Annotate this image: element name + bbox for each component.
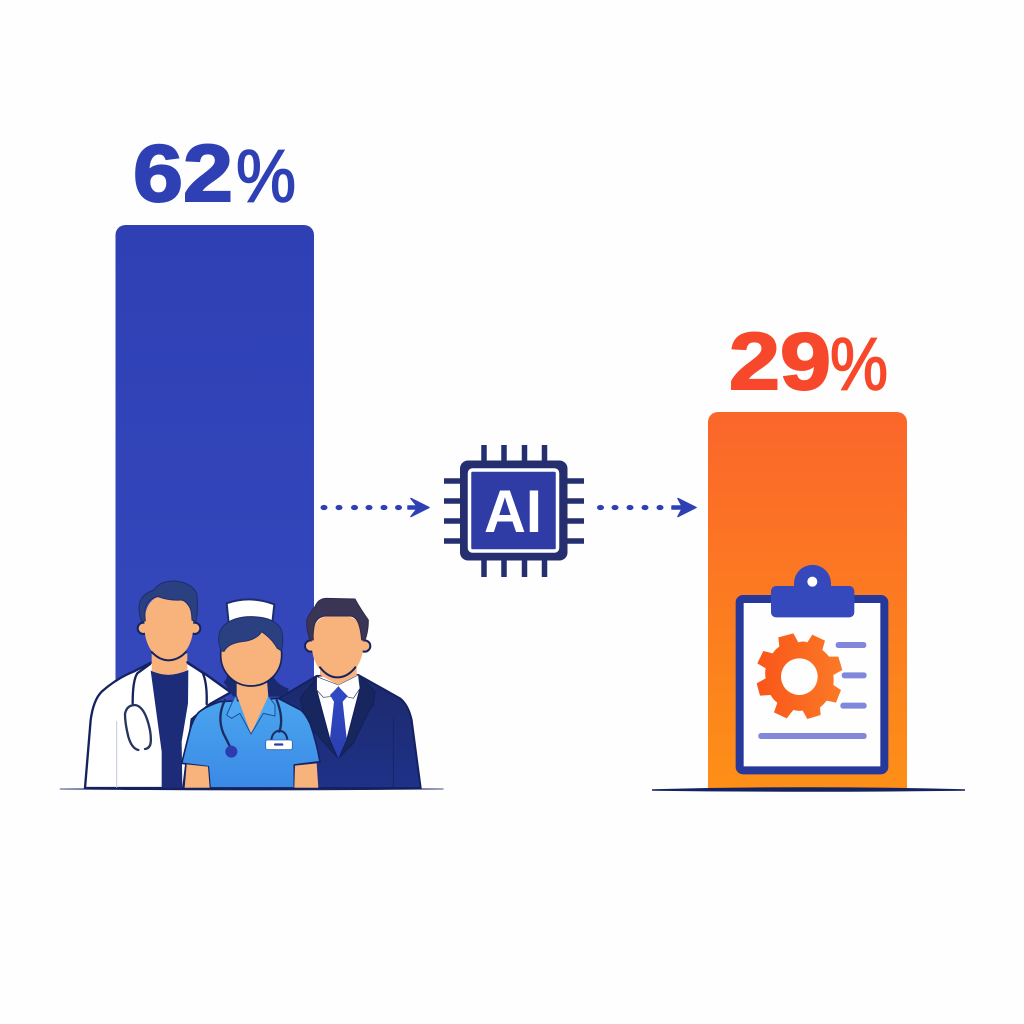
baseline — [60, 788, 443, 790]
gear — [757, 633, 842, 719]
figure: doctor in white coat — [85, 581, 231, 788]
name badge — [266, 740, 292, 750]
stethoscope chest piece — [225, 746, 237, 758]
baseline: right — [652, 788, 965, 791]
icon: healthcare team — [60, 581, 443, 790]
value label: 62%: % — [236, 134, 296, 218]
bar: 62% blue — [116, 225, 314, 790]
value label: 62% — [133, 129, 296, 219]
value label: 62%: 62 — [133, 129, 233, 219]
value label: 29%: % — [830, 322, 888, 406]
arrow: AI chip to bar — [597, 498, 696, 516]
clipboard clip — [771, 565, 854, 617]
figure: nurse in scrubs — [182, 599, 320, 788]
bar: 29% orange — [708, 412, 907, 790]
clipboard board — [740, 599, 884, 770]
text lines — [758, 642, 867, 739]
value label: 29%: 29 — [729, 317, 831, 407]
value label: 29% — [729, 317, 888, 407]
icon: AI chip: AI — [484, 478, 542, 545]
icon: clipboard with gear — [740, 565, 884, 770]
figure: executive in suit — [273, 598, 421, 788]
arrow: bar to AI chip — [320, 498, 429, 516]
icon: AI chip — [444, 445, 584, 577]
